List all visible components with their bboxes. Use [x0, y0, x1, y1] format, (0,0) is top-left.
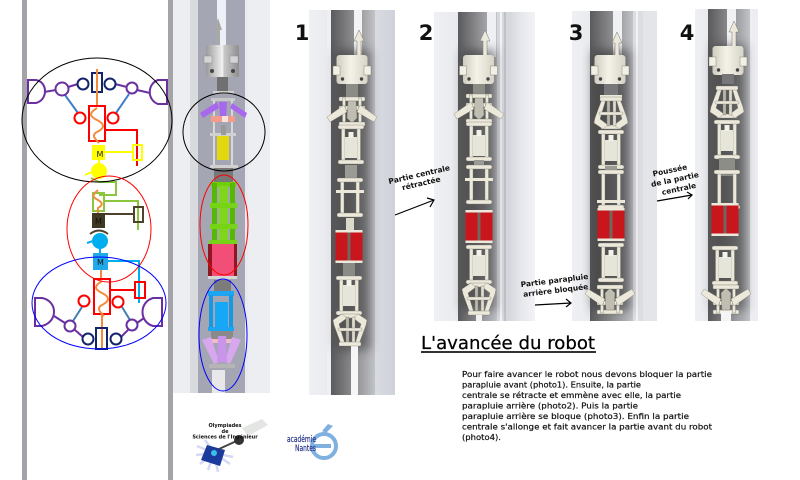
photo 4: central part extended [695, 9, 758, 321]
text block: explanation: parapluie avant (photo1). Ensuite, la partie [462, 380, 641, 390]
annotation: partie parapluie arrière bloquée [520, 272, 590, 299]
title: L'avancée du robot [421, 333, 595, 354]
logo: académie de Nantes [287, 424, 336, 458]
annotation: poussée de la partie centrale [648, 160, 702, 199]
text block: explanation: centrale se rétracte et emmène avec elle, la partie [462, 390, 681, 400]
photo 1: front umbrella blocked [309, 10, 395, 395]
photo: coloured robot in tube [173, 0, 270, 393]
label: yellow motor M: M [97, 150, 104, 159]
annotation: partie parapluie arrière bloquée: arrière bloquée [523, 282, 589, 299]
annotation: poussée de la partie centrale: centrale [661, 181, 697, 197]
text block: explanation: centrale s'allonge et fait avancer la partie avant du robot [462, 422, 713, 432]
schematic: rear umbrella section [35, 270, 162, 350]
arrow: to photo 4 [657, 192, 692, 201]
number 2: 2 [419, 21, 433, 45]
ellipse: rear section on photo [199, 279, 247, 391]
number 4: 4 [680, 21, 694, 45]
annotation: partie parapluie arrière bloquée: Partie parapluie [520, 272, 589, 289]
label: dark motor M: M [95, 217, 102, 226]
text block: explanation: Pour faire avancer le robot nous devons bloquer la partie [462, 369, 712, 379]
text block: explanation: parapluie arrière (photo2). Puis la partie [462, 400, 638, 410]
photo 2: central part retracted [434, 12, 535, 321]
annotation: poussée de la partie centrale: Poussée [652, 162, 688, 178]
photo 3: rear umbrella blocked [572, 11, 657, 321]
ellipse: front section outline [22, 58, 172, 182]
text block: explanation [462, 369, 713, 442]
label: blue motor M: M [97, 258, 104, 267]
number 1: 1 [295, 21, 309, 45]
ellipse: rear section outline [32, 257, 166, 349]
logo: Olympiades de Sciences de l'Ingénieur: Sciences de l'Ingénieur [192, 434, 258, 440]
logo: Olympiades de Sciences de l'Ingénieur: de [222, 429, 229, 435]
text block: explanation: parapluie arrière se bloque (photo3). Enfin la partie [462, 411, 689, 421]
arrow: to photo 2 [395, 198, 434, 215]
panel: left schematic background rails [22, 0, 173, 480]
text block: explanation: (photo4). [462, 432, 501, 442]
ellipse: central section outline [67, 176, 151, 282]
ellipse: front section on photo [183, 93, 265, 171]
annotation: partie centrale rétractée: Partie centrale [388, 163, 451, 186]
number 3: 3 [569, 21, 583, 45]
logo: Olympiades de Sciences de l'Ingénieur: Olympiades [208, 423, 242, 429]
annotation: poussée de la partie centrale: de la partie [650, 170, 700, 189]
arrow: to photo 3 [535, 299, 571, 307]
logo: Olympiades de Sciences de l'Ingénieur [192, 419, 268, 472]
logo: académie de Nantes: Nantes [295, 444, 316, 454]
ellipse: central section on photo [200, 175, 248, 275]
schematic: central section [87, 178, 143, 303]
annotation: partie centrale rétractée: rétractée [401, 175, 441, 192]
schematic: front umbrella section [28, 69, 167, 179]
logo: académie de Nantes: académie [287, 434, 316, 445]
